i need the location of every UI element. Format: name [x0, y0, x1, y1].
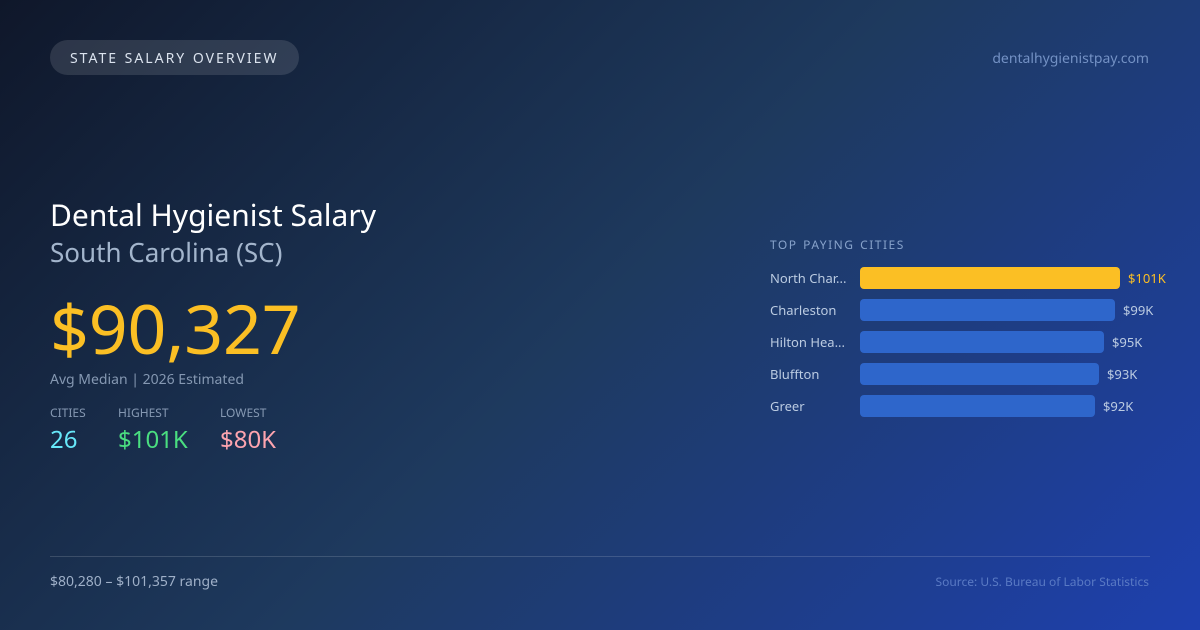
bar row: Greer: Greer: [770, 397, 805, 415]
bar row: Bluffton: $93K: [1107, 365, 1137, 383]
chart heading: TOP PAYING CITIES: [770, 236, 905, 253]
bar row: Greer: [770, 395, 1134, 417]
bar row: Greer: $92K: [1103, 397, 1133, 415]
bar row: Charleston: $99K: [1123, 301, 1153, 319]
stat: highest: [118, 404, 188, 456]
bar row: North Charleston: North Char...: [770, 269, 847, 287]
bar row: North Charleston: [770, 267, 1166, 289]
stat: lowest: [220, 404, 276, 456]
stat: cities: CITIES: [50, 404, 86, 421]
bar row: Hilton Head: Hilton Hea...: [770, 333, 845, 351]
bar row: Bluffton: Bluffton: [770, 365, 819, 383]
stat: cities: 26: [50, 423, 77, 456]
source note: Source: U.S. Bureau of Labor Statistics: [936, 573, 1149, 590]
badge: state salary overview: STATE SALARY OVERVIEW: [70, 49, 278, 68]
stats row: [50, 404, 276, 456]
badge: state salary overview: [50, 40, 299, 75]
subtitle: state: South Carolina (SC): [50, 234, 282, 270]
bar row: North Charleston: $101K: [1128, 269, 1166, 287]
salary caption: Avg Median | 2026 Estimated: [50, 370, 244, 389]
stat: lowest: $80K: [220, 423, 276, 456]
bar row: Charleston: [770, 299, 1154, 321]
bar row: Hilton Head: $95K: [1112, 333, 1142, 351]
stat: highest: $101K: [118, 423, 188, 456]
stat: highest: HIGHEST: [118, 404, 169, 421]
bar row: Charleston: Charleston: [770, 301, 836, 319]
stat: lowest: LOWEST: [220, 404, 266, 421]
site domain: dentalhygienistpay.com: [992, 49, 1149, 68]
stat: cities: [50, 404, 86, 456]
title: Dental Hygienist Salary: [50, 194, 376, 235]
headline salary: $90,327: [50, 281, 301, 374]
bar row: Hilton Head: [770, 331, 1142, 353]
bar row: Bluffton: [770, 363, 1138, 385]
salary range: $80,280 – $101,357 range: [50, 572, 218, 591]
